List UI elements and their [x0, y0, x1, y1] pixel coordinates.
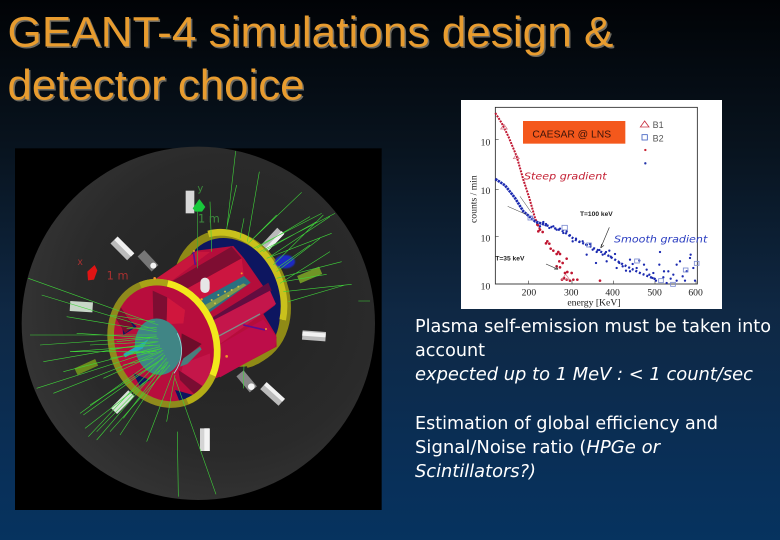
- legend: B2: [653, 133, 664, 143]
- title: GEANT-4 simulations design &: [8, 8, 614, 56]
- axis labels: 400: [605, 287, 620, 298]
- axis labels: 10: [481, 233, 490, 244]
- front ring: [93, 266, 235, 421]
- axis labels: 10: [481, 281, 490, 292]
- text block: plasma self-emission: [415, 316, 771, 385]
- annotation: steep gradient: Steep gradient: [524, 171, 608, 182]
- axis x marker: [77, 257, 129, 283]
- axis labels: 500: [647, 287, 662, 298]
- top band: [155, 252, 210, 283]
- axis y marker: y: [197, 184, 203, 195]
- central disc: [130, 315, 186, 379]
- CAESAR label: CAESAR @ LNS: [532, 129, 611, 140]
- annotation: smooth gradient: Smooth gradient: [614, 235, 709, 246]
- particle tracks: [28, 151, 370, 497]
- CAESAR label: [523, 121, 625, 144]
- hit dots: [153, 250, 267, 358]
- front ring interior: [93, 266, 235, 421]
- annotation: T=100 keV: T=100 keV: [580, 211, 613, 218]
- blue blob: [275, 255, 295, 268]
- axis labels: 300: [564, 287, 579, 298]
- outer detector cylinders: [70, 191, 326, 451]
- magnet assembly: [93, 217, 306, 421]
- annotation: T=35 keV: T=35 keV: [495, 255, 525, 262]
- text block: plasma self-emission: Plasma self-emission must be taken into: [415, 316, 771, 337]
- axis x marker: 1 m: [107, 269, 129, 283]
- title: detector choice: [8, 62, 304, 110]
- axis y marker: [193, 184, 220, 225]
- legend: B1: [653, 120, 664, 130]
- blue series: [495, 179, 547, 225]
- annotation: T=35 keV: [495, 255, 558, 269]
- text block: efficiency estimation: Estimation of global efficiency and: [415, 413, 718, 434]
- axis labels: counts / min: [469, 175, 480, 223]
- axis labels: 600: [688, 287, 703, 298]
- text block: efficiency estimation: Scintillators?): [415, 461, 536, 482]
- annotation: T=100 keV: [580, 211, 613, 248]
- red series: [495, 113, 540, 230]
- chart content: [469, 107, 709, 308]
- text block: efficiency estimation: Signal/Noise ratio (HPGe or: [415, 437, 662, 458]
- legend: [640, 120, 664, 164]
- axis labels: 10: [481, 137, 490, 148]
- panel: counts vs energy chart: [461, 100, 722, 309]
- title: detector choice: [9, 63, 306, 111]
- axis y marker: 1 m: [198, 211, 220, 225]
- text block: plasma self-emission: account: [415, 340, 485, 361]
- axis labels: 200: [522, 287, 536, 298]
- axis labels: 10: [481, 186, 490, 197]
- lower face: [217, 319, 277, 377]
- dark purple band: [208, 283, 272, 327]
- text block: efficiency estimation: [415, 413, 718, 482]
- text block: plasma self-emission: expected up to 1 MeV : < 1 count/sec: [415, 364, 753, 385]
- side face: [207, 291, 276, 344]
- title: [8, 8, 615, 111]
- back ring: [157, 217, 306, 380]
- title: GEANT-4 simulations design &: [9, 10, 615, 58]
- axis labels: [469, 137, 703, 308]
- scintillator strip: [195, 276, 251, 314]
- axis labels: energy [KeV]: [567, 297, 621, 308]
- upper face: [168, 258, 244, 320]
- axis x marker: x: [77, 257, 83, 268]
- red body: [133, 246, 277, 393]
- panel: GEANT-4 detector simulation: [15, 147, 382, 510]
- inner cylinder: [191, 282, 219, 288]
